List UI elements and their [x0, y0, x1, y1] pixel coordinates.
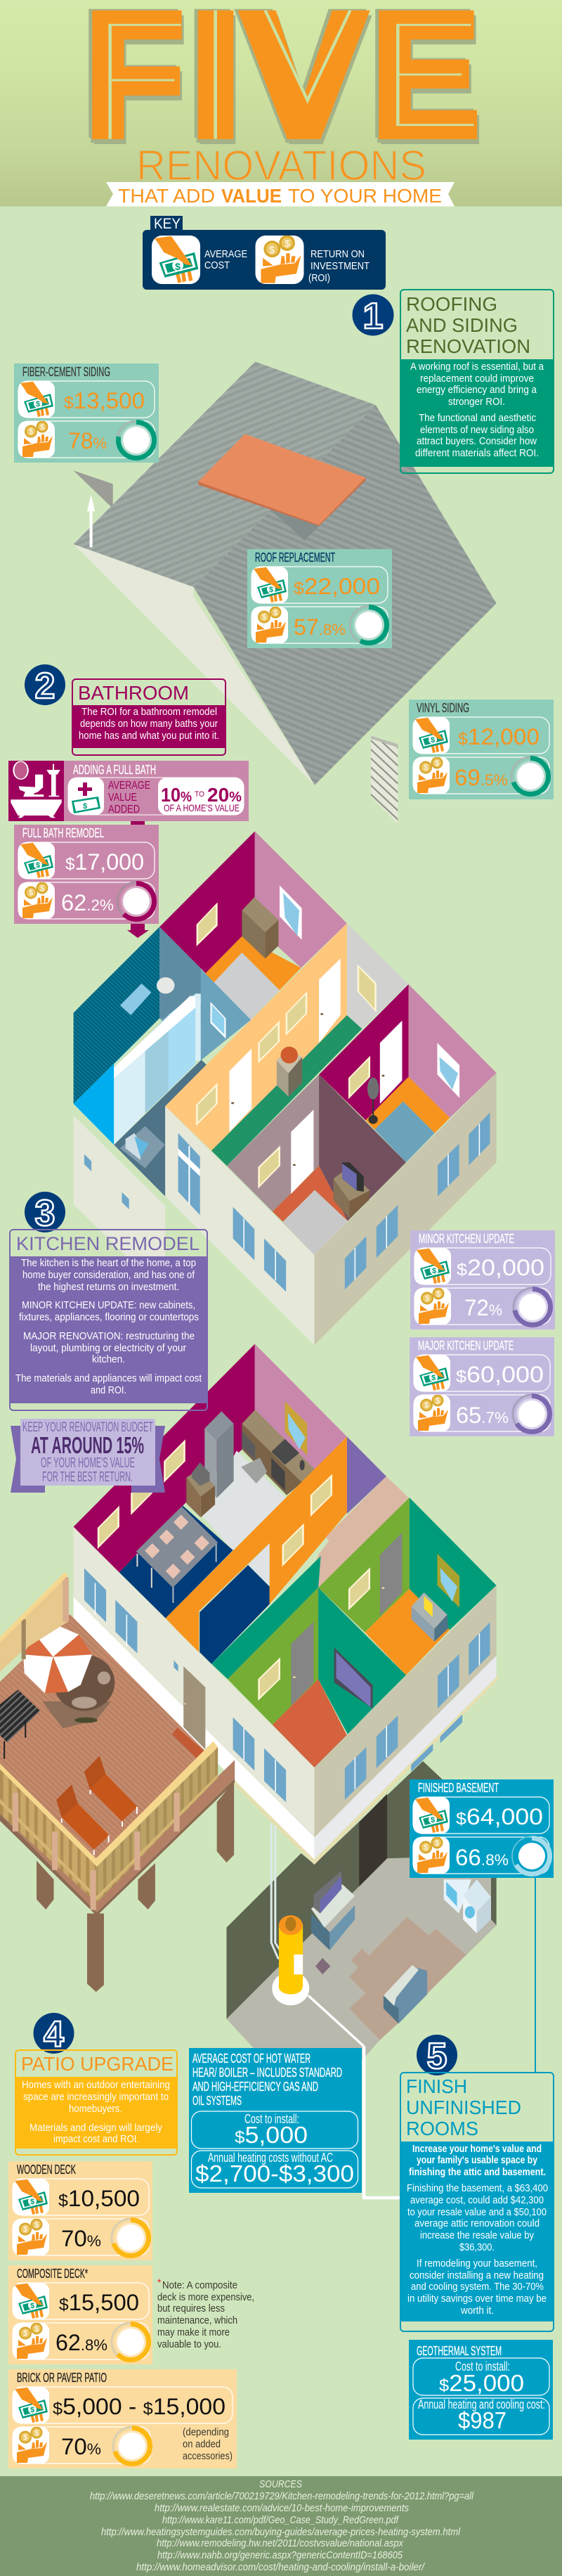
- windows: lower floor exterior: [84, 1569, 490, 1802]
- panel: roofing and siding renovation: [400, 290, 554, 473]
- section 5 number badge: 5: [427, 2036, 447, 2077]
- stat card: roof replacement: $: [273, 609, 277, 617]
- microwave on stand: [186, 1462, 215, 1517]
- annual cost: [413, 2397, 549, 2435]
- stat card: finished basement: $64,000: [456, 1804, 543, 1829]
- header background: [0, 0, 562, 207]
- stat card: vinyl siding: $: [431, 736, 435, 745]
- icon: bathroom fixtures: [8, 761, 64, 821]
- stat card: vinyl siding: $: [435, 759, 439, 768]
- cost to install: $25,000: [439, 2370, 524, 2396]
- body text: increase the resale value by: [420, 2230, 535, 2241]
- media cabinet with tv: [311, 1871, 355, 1950]
- body text: your family's usable space by: [417, 2155, 537, 2166]
- stat card: major kitchen update: $60,000: [456, 1362, 544, 1387]
- stat card: full bath remodel: [14, 825, 159, 924]
- stat card: brick or paver patio: [8, 2369, 237, 2468]
- stairs: [289, 1476, 409, 1616]
- stat card: fiber-cement siding: $13,500: [64, 388, 145, 413]
- heading: RENOVATION: [406, 335, 530, 357]
- key panel: RETURN ON: [311, 248, 365, 260]
- body text: replacement could improve: [420, 373, 534, 385]
- value range: TO: [195, 790, 204, 799]
- panel: patio upgrade: [15, 2050, 177, 2155]
- body text: different materials affect ROI.: [415, 448, 539, 459]
- stat card: wooden deck: WOODEN DECK: [17, 2163, 76, 2177]
- key panel: KEY: [154, 216, 181, 232]
- stat card: roof replacement: $: [269, 586, 273, 594]
- annual cost: $987: [458, 2407, 507, 2433]
- key panel: INVESTMENT: [311, 260, 370, 272]
- callout: budget ribbon: KEEP YOUR RENOVATION BUDGET: [22, 1420, 153, 1435]
- annual heating costs: [191, 2151, 358, 2188]
- body text: The materials and appliances will impact cost: [15, 1373, 202, 1384]
- value range: 20%: [207, 784, 242, 806]
- stat card: minor kitchen update: $: [436, 1290, 440, 1299]
- callout: budget ribbon: AT AROUND 15%: [31, 1432, 144, 1458]
- windows: upper floor exterior: [84, 1112, 490, 1292]
- key panel: $: [269, 244, 275, 255]
- body text: worth it.: [460, 2305, 494, 2317]
- footer: sources: http://www.homeadvisor.com/cost/heating-and-cooling/install-a-boiler/: [136, 2562, 426, 2573]
- body text: [72, 705, 226, 748]
- note: composite deck: [157, 2276, 254, 2350]
- stat card: composite deck: $15,500: [59, 2290, 139, 2315]
- stat card: brick or paver patio: $: [34, 2429, 39, 2437]
- callout: budget ribbon: OF YOUR HOME'S VALUE: [41, 1455, 135, 1471]
- heading: ADDING A FULL BATH: [73, 763, 156, 777]
- stat card: finished basement: 66.8%: [455, 1845, 509, 1870]
- panel: hot water heater costs: HEAR/ BOILER – INCLUDES STANDARD: [192, 2066, 342, 2080]
- stat card: minor kitchen update: $: [425, 1294, 429, 1303]
- balustrade upper left: [0, 1573, 69, 1672]
- cost to install: Cost to install:: [244, 2112, 299, 2126]
- cost to install: [191, 2111, 358, 2149]
- stat card: fiber-cement siding: $: [40, 423, 44, 432]
- pipe: [308, 1995, 363, 2046]
- stat card: minor kitchen update: $20,000: [457, 1255, 544, 1280]
- stat card: roof replacement: [247, 549, 392, 648]
- body text: Materials and design will largely: [30, 2123, 163, 2134]
- footer: sources: SOURCES: [259, 2479, 302, 2490]
- stat card: vinyl siding: $: [424, 764, 428, 772]
- illustration: upper floor of house: [74, 831, 497, 1345]
- footer: sources: http://www.deseretnews.com/article/700219729/Kitchen-remodeling-trends-for-2012.html?pg=all: [90, 2491, 474, 2502]
- body text: space are increasingly important to: [23, 2092, 169, 2103]
- stat card: fiber-cement siding: $: [29, 427, 33, 436]
- body text: home has and what you put into it.: [79, 730, 219, 742]
- wall: front left exterior: [165, 1106, 314, 1345]
- average value label: VALUE: [108, 792, 137, 804]
- doormat: [172, 1727, 204, 1759]
- subtitle ribbon: TO YOUR HOME: [288, 185, 442, 207]
- deck posts: [37, 1781, 234, 1992]
- section 2 number badge: [25, 664, 65, 707]
- body text: The functional and aesthetic: [419, 413, 536, 424]
- body text: energy efficiency and bring a: [417, 385, 537, 396]
- stat card: wooden deck: $10,500: [58, 2186, 140, 2211]
- stat card: composite deck: $: [23, 2329, 27, 2338]
- body text: MINOR KITCHEN UPDATE: new cabinets,: [22, 1300, 195, 1311]
- stat card: fiber-cement siding: $: [36, 400, 40, 408]
- stat card: brick or paver patio: (depending: [183, 2427, 229, 2438]
- body text: layout, plumbing or electricity of your: [30, 1343, 186, 1354]
- body text: in utility savings over time may be: [407, 2293, 547, 2305]
- stat card: minor kitchen update: 72%: [464, 1295, 502, 1320]
- panel: bathroom: [72, 679, 226, 755]
- panel: geothermal system: GEOTHERMAL SYSTEM: [417, 2344, 502, 2358]
- footer: sources: http://www.kare11.com/pdf/Geo_Case_Study_RedGreen.pdf: [162, 2515, 400, 2526]
- heading: ROOMS: [406, 2118, 478, 2139]
- balustrade front: [0, 1741, 218, 1910]
- stat card: finished basement: $: [424, 1843, 428, 1852]
- value range: OF A HOME'S VALUE: [164, 802, 240, 813]
- illustration: vinyl siding sample: [371, 736, 398, 824]
- body text: home buyer consideration, and has one of: [22, 1270, 195, 1281]
- stat card: roof replacement: 57.8%: [294, 614, 346, 640]
- stat card: full bath remodel: $: [29, 889, 33, 897]
- stat card: full bath remodel: $: [36, 861, 40, 870]
- note: composite deck: *: [157, 2276, 162, 2288]
- key panel: AVERAGE: [204, 248, 247, 260]
- body text: Increase your home's value and: [412, 2144, 542, 2155]
- room: bedroom wine walls: [159, 831, 347, 1020]
- stat card: major kitchen update: [410, 1337, 554, 1436]
- room: living room green: [211, 1556, 406, 1767]
- illustration: lower floor of house: [74, 1344, 497, 1767]
- annual heating costs: Annual heating costs without AC: [208, 2151, 333, 2165]
- room: living room plum: [227, 1074, 406, 1255]
- body text: A working roof is essential, but a: [410, 361, 544, 373]
- note: composite deck: valuable to you.: [157, 2339, 221, 2350]
- footer: sources: http://www.nahb.org/generic.aspx?genericContentID=168605: [157, 2550, 403, 2561]
- heading: BATHROOM: [78, 682, 189, 704]
- body text: and ROI.: [91, 1385, 126, 1396]
- stat card: major kitchen update: $: [424, 1401, 429, 1410]
- stat card: composite deck: [8, 2265, 152, 2364]
- body text: MAJOR RENOVATION: restructuring the: [23, 1331, 195, 1342]
- stat card: wooden deck: [8, 2161, 152, 2260]
- note: composite deck: but requires less: [157, 2303, 225, 2314]
- stat card: full bath remodel: $17,000: [65, 849, 144, 875]
- heading: FINISH: [406, 2075, 467, 2097]
- water pipes: [271, 1823, 278, 1959]
- section 3 number badge: 3: [35, 1193, 55, 1234]
- panel: hot water heater costs: OIL SYSTEMS: [192, 2094, 242, 2108]
- stat card: vinyl siding: $12,000: [458, 724, 540, 749]
- heading: KITCHEN REMODEL: [16, 1233, 200, 1254]
- section 5 number badge: [417, 2035, 457, 2077]
- kitchen counter and stove: [241, 1410, 315, 1495]
- body text: average attic renovation could: [414, 2218, 540, 2229]
- heading: [406, 293, 530, 357]
- body text: [15, 2077, 177, 2149]
- key panel: $: [175, 261, 181, 272]
- body text: elements of new siding also: [420, 425, 534, 436]
- body text: impact cost and ROI.: [53, 2134, 139, 2145]
- callout: budget ribbon: FOR THE BEST RETURN.: [42, 1469, 133, 1485]
- stat card: brick or paver patio: $: [23, 2433, 27, 2442]
- footer: sources: http://www.realestate.com/advice/10-best-home-improvements: [155, 2503, 409, 2514]
- stat card: finished basement: FINISHED BASEMENT: [418, 1781, 499, 1795]
- room: study green: [318, 1498, 497, 1675]
- section 3 number badge: [25, 1192, 65, 1234]
- section 4 number badge: 4: [44, 2014, 64, 2055]
- subtitle ribbon: THAT ADD: [118, 185, 215, 207]
- note: composite deck: maintenance, which: [157, 2315, 237, 2326]
- footer: sources: http://www.remodeling.hw.net/2011/costvsvalue/national.aspx: [157, 2538, 404, 2549]
- dining table: [136, 1507, 218, 1603]
- cost to install: $5,000: [235, 2122, 308, 2148]
- stat card: full bath remodel: $: [40, 884, 44, 893]
- body text: Homes with an outdoor entertaining: [22, 2080, 170, 2091]
- body text: Finishing the basement, a $63,400: [407, 2183, 548, 2194]
- section 1 number badge: [353, 294, 393, 337]
- stat card: composite deck: COMPOSITE DECK*: [17, 2267, 88, 2281]
- stat card: roof replacement: ROOF REPLACEMENT: [255, 550, 335, 565]
- panel: hot water heater costs: [189, 2048, 362, 2193]
- note: composite deck: Note: A composite: [162, 2280, 237, 2291]
- sofa: [384, 1965, 427, 2023]
- stat card: minor kitchen update: $: [432, 1267, 436, 1275]
- room: peach hallway: [165, 923, 409, 1166]
- note: composite deck: may make it more: [157, 2327, 230, 2338]
- stat card: roof replacement: $: [262, 613, 266, 622]
- stat card: wooden deck: 70%: [61, 2226, 101, 2251]
- grill: [0, 1689, 40, 1759]
- key panel: (ROI): [308, 272, 330, 284]
- stat card: wooden deck: $: [23, 2225, 27, 2234]
- room: bathroom: [74, 927, 251, 1197]
- side table: [315, 1958, 330, 1974]
- panel: hot water heater costs: AND HIGH-EFFICIENCY GAS AND: [192, 2080, 318, 2094]
- title: RENOVATIONS: RENOVATIONS: [136, 142, 426, 189]
- wall: front right exterior: [314, 1073, 497, 1345]
- heading: UNFINISHED: [406, 2097, 521, 2118]
- body text: If remodeling your basement,: [417, 2258, 537, 2269]
- body text: average cost, could add $42,300: [410, 2195, 544, 2206]
- stat card: major kitchen update: 65.7%: [456, 1403, 509, 1428]
- room: kitchen walls: [74, 1344, 347, 1618]
- note: composite deck: deck is more expensive,: [157, 2292, 254, 2303]
- stat card: brick or paver patio: BRICK OR PAVER PATIO: [17, 2371, 107, 2385]
- illustration: roof: [74, 361, 497, 785]
- deck floor: [0, 1614, 218, 1867]
- wall: bathroom exterior left: [74, 1116, 165, 1294]
- body text: kitchen.: [92, 1354, 125, 1365]
- title: FIVE: [86, 0, 479, 172]
- footer: sources: [0, 2476, 562, 2576]
- stat card: wooden deck: $: [30, 2198, 34, 2206]
- stat card: fiber-cement siding: [14, 363, 159, 463]
- stat card: minor kitchen update: [410, 1230, 555, 1329]
- umbrella: [23, 1625, 92, 1693]
- body text: and cooling system. The 30-70%: [411, 2281, 544, 2293]
- average value label: [108, 780, 150, 816]
- door: [359, 1794, 387, 1886]
- stat card: brick or paver patio: 70%: [61, 2434, 101, 2459]
- room: second bedroom: [319, 984, 497, 1162]
- stat card: brick or paver patio: $: [30, 2406, 34, 2414]
- stat card: wooden deck: $: [34, 2221, 39, 2229]
- value range: 10%: [161, 784, 192, 806]
- heading: AND SIDING: [406, 314, 518, 336]
- table under umbrella: [42, 1654, 115, 1728]
- fridge: [204, 1411, 234, 1498]
- subtitle ribbon: [106, 182, 455, 207]
- pipe to finish rooms panel: [364, 2046, 400, 2198]
- panel: kitchen remodel: [10, 1230, 207, 1410]
- body text: The ROI for a bathroom remodel: [81, 707, 217, 718]
- icon: plus and banknote: $: [83, 802, 87, 811]
- body text: The kitchen is the heart of the home, a top: [21, 1258, 196, 1269]
- stat card: fiber-cement siding: 78%: [68, 428, 107, 453]
- value range: [158, 778, 244, 815]
- lounge chairs: [56, 1756, 138, 1855]
- footer: sources: http://www.heatingsystemguides.com/buying-guides/average-prices-heating-system.html: [101, 2527, 461, 2538]
- panel: adding a full bath: [8, 761, 249, 821]
- stat card: finished basement: $: [431, 1816, 435, 1824]
- annual heating costs: $2,700-$3,300: [195, 2160, 354, 2187]
- key panel: COST: [204, 259, 230, 271]
- connector line to finish rooms: [535, 1878, 536, 2073]
- water heater boiler: [272, 1915, 309, 2005]
- key panel: $: [285, 238, 290, 249]
- heading: ROOFING: [406, 293, 497, 315]
- average value label: AVERAGE: [108, 780, 150, 792]
- icon: plus and banknote: [68, 778, 244, 815]
- heading: [406, 2075, 521, 2139]
- stat card: major kitchen update: $: [431, 1374, 436, 1382]
- body text: homebuyers.: [69, 2104, 122, 2115]
- body text: to your resale value and a $50,100: [407, 2207, 547, 2218]
- panel: geothermal system: [409, 2340, 553, 2440]
- panel: finish unfinished rooms: [400, 2073, 554, 2331]
- callout: budget ribbon: [11, 1419, 165, 1493]
- rug: [349, 1917, 466, 2040]
- stat card: brick or paver patio: on added: [183, 2439, 221, 2450]
- stat card: vinyl siding: 69.5%: [455, 765, 508, 790]
- body text: [400, 359, 554, 467]
- stat card: fiber-cement siding: FIBER-CEMENT SIDING: [22, 365, 110, 379]
- illustration: basement: [226, 1761, 497, 2062]
- body text: $36,300.: [459, 2242, 495, 2253]
- stat card: roof replacement: $22,000: [294, 574, 380, 599]
- body text: fixtures, appliances, flooring or countertops: [19, 1312, 199, 1323]
- body text: stronger ROI.: [448, 397, 505, 408]
- stat card: brick or paver patio: $5,000 - $15,000: [53, 2394, 226, 2419]
- body text: depends on how many baths your: [80, 719, 218, 730]
- average value label: ADDED: [108, 804, 140, 816]
- body text: the highest returns on investment.: [38, 1282, 179, 1293]
- connector between bath panels: [131, 821, 145, 825]
- illustration: patio deck: [0, 1573, 235, 1992]
- stat card: composite deck: 62.8%: [55, 2330, 107, 2355]
- section 2 number badge: 2: [35, 666, 55, 707]
- body text: [400, 2142, 554, 2321]
- stat card: major kitchen update: $: [436, 1397, 440, 1405]
- room: orange hallway: [166, 1436, 386, 1664]
- key panel: [143, 216, 386, 290]
- stat card: full bath remodel: 62.2%: [61, 890, 114, 915]
- body text: [10, 1256, 207, 1403]
- stat card: full bath remodel: FULL BATH REMODEL: [22, 826, 104, 840]
- body text: attract buyers. Consider how: [417, 436, 537, 447]
- stat card: composite deck: $: [34, 2325, 39, 2333]
- stat card: vinyl siding: [409, 700, 554, 799]
- body text: consider installing a new heating: [410, 2270, 544, 2281]
- arrow: down to bathroom: [127, 924, 149, 938]
- subtitle ribbon: VALUE: [221, 185, 282, 207]
- section 1 number badge: 1: [363, 296, 383, 337]
- stat card: vinyl siding: VINYL SIDING: [417, 701, 469, 715]
- heading: PATIO UPGRADE: [21, 2053, 174, 2075]
- cost to install: Cost to install:: [455, 2359, 510, 2374]
- illustration: lower floor exterior walls: [74, 1527, 500, 1865]
- stat card: composite deck: $: [30, 2302, 34, 2310]
- cost to install: [413, 2358, 549, 2396]
- stat card: brick or paver patio: accessories): [183, 2451, 233, 2462]
- section 4 number badge: [34, 2013, 74, 2055]
- stat card: finished basement: [410, 1779, 554, 1878]
- panel: hot water heater costs: AVERAGE COST OF HOT WATER: [192, 2052, 311, 2066]
- stat card: finished basement: $: [435, 1839, 439, 1848]
- washer and dryer: [444, 1879, 491, 1933]
